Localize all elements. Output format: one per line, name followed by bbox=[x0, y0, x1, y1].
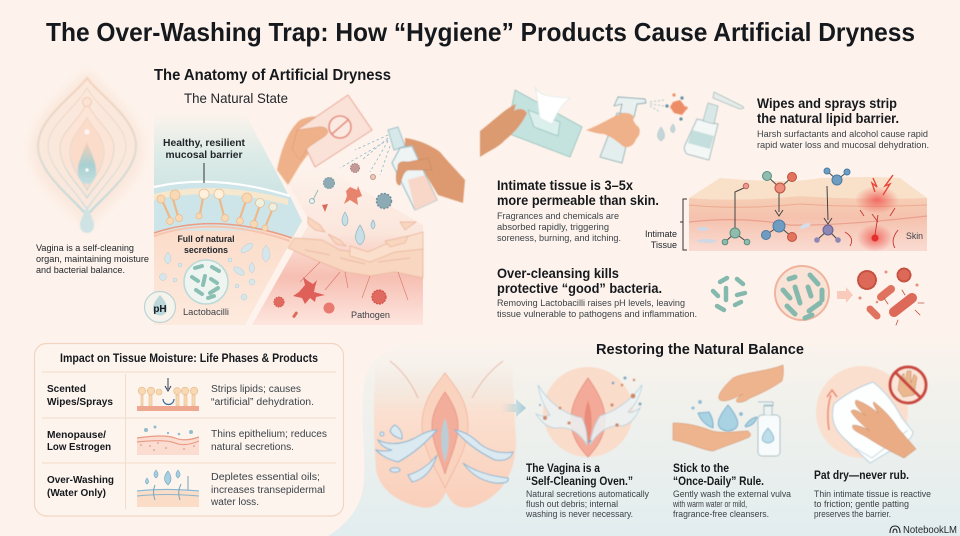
text: over-cleansing: tissue vulnerable to pathogens and inflammation. bbox=[497, 309, 697, 319]
irritants and pathogens bbox=[274, 164, 392, 318]
droplets bbox=[160, 242, 270, 300]
water streams bbox=[376, 425, 513, 483]
text: pat dry: preserves the barrier. bbox=[814, 509, 891, 519]
cracked skin plates bbox=[288, 217, 423, 278]
label: pathogen: Pathogen bbox=[351, 310, 390, 320]
label: lactobacilli: Lactobacilli bbox=[183, 307, 229, 317]
row: scented wipes: Wipes/Sprays bbox=[47, 396, 113, 408]
text: once-daily rule: with warm water or mild, bbox=[672, 499, 747, 509]
illustration: self-cleaning circle bbox=[536, 367, 642, 457]
panel: damaged tissue bbox=[252, 95, 465, 325]
lactobacilli circle bbox=[184, 260, 228, 304]
text: wipes and sprays: Wipes and sprays strip bbox=[757, 95, 897, 111]
label: natural secretions: secretions bbox=[184, 245, 228, 255]
text: over-cleansing: Over-cleansing kills bbox=[497, 265, 619, 281]
illustration: anatomy with water streams bbox=[374, 361, 516, 508]
no-rubbing sign bbox=[890, 367, 926, 403]
text: once-daily rule: Gently wash the external vulva bbox=[673, 489, 791, 499]
good bacteria cluster bbox=[713, 278, 745, 310]
circled bacteria bbox=[775, 266, 829, 320]
text: wipes and sprays: rapid water loss and mucosal dehydration. bbox=[757, 140, 929, 150]
text: wipes and sprays: the natural lipid barrier. bbox=[757, 110, 899, 126]
text: once-daily rule: fragrance-free cleansers. bbox=[673, 509, 769, 519]
row: over-washing: (Water Only) bbox=[47, 487, 106, 499]
wipes pack bbox=[480, 87, 582, 157]
text: wipes and sprays bbox=[757, 95, 929, 150]
label: intimate tissue: Tissue bbox=[651, 240, 677, 250]
text: self-cleaning organ bbox=[36, 243, 149, 276]
label: skin: Skin bbox=[906, 231, 923, 241]
diagram: bacteria loss bbox=[713, 266, 924, 325]
row: over-washing: Over-Washing bbox=[47, 474, 114, 486]
pink arrow bbox=[837, 287, 853, 303]
label: natural secretions bbox=[178, 234, 234, 255]
spray bottle and hand bbox=[388, 127, 465, 210]
mist and irritant bbox=[650, 93, 688, 141]
cleanser bottle bbox=[758, 402, 780, 456]
label: natural secretions: Full of natural bbox=[178, 234, 234, 244]
text: once-daily rule: Stick to the bbox=[673, 463, 729, 475]
text: intimate tissue permeability: soreness, burning, and itching. bbox=[497, 233, 621, 243]
text: self-cleaning oven: flush out debris; internal bbox=[526, 499, 618, 509]
text: self-cleaning oven: washing is never necessary. bbox=[525, 509, 633, 519]
heading: anatomy of artificial dryness: The Anatomy of Artificial Dryness bbox=[154, 67, 391, 84]
upper hand bbox=[719, 365, 783, 402]
spray bottle bbox=[586, 97, 646, 163]
lower hand bbox=[673, 423, 751, 451]
text: self-cleaning organ: Vagina is a self-cleaning bbox=[36, 243, 134, 254]
title: The Over-Washing Trap: How “Hygiene” Products Cause Artificial Dryness bbox=[46, 17, 915, 47]
text: self-cleaning oven bbox=[525, 463, 649, 519]
lipid bilayer bbox=[154, 188, 288, 231]
text: once-daily rule bbox=[672, 463, 791, 519]
text: over-cleansing: protective “good” bacteria. bbox=[497, 280, 662, 296]
label: intimate tissue: Intimate bbox=[645, 229, 677, 239]
text: pat dry bbox=[814, 470, 931, 519]
row: menopause: Menopause/ bbox=[47, 429, 106, 441]
wipes packet and hand bbox=[277, 95, 372, 185]
text: self-cleaning organ: and bacterial balance. bbox=[36, 265, 125, 276]
row: over-washing: water loss. bbox=[210, 497, 259, 508]
text: pat dry: Pat dry—never rub. bbox=[814, 470, 909, 482]
row: menopause: natural secretions. bbox=[211, 442, 294, 453]
text: intimate tissue permeability: absorbed rapidly, triggering bbox=[497, 222, 609, 232]
label: healthy barrier: mucosal barrier bbox=[166, 149, 242, 161]
spray mist bbox=[340, 135, 390, 175]
text: intimate tissue permeability: more permeable than skin. bbox=[497, 192, 659, 208]
illustration: gentle washing hands and cleanser bbox=[673, 365, 783, 456]
text: once-daily rule: “Once-Daily” Rule. bbox=[673, 476, 764, 488]
text: intimate tissue permeability: Fragrances and chemicals are bbox=[497, 211, 619, 221]
text: pat dry: Thin intimate tissue is reactive bbox=[814, 489, 931, 499]
text: intimate tissue permeability bbox=[497, 177, 659, 243]
row: scented wipes bbox=[47, 378, 314, 411]
row: scented wipes: Scented bbox=[47, 383, 86, 395]
text: intimate tissue permeability: Intimate tissue is 3–5x bbox=[497, 177, 633, 193]
arrow to self-cleaning bbox=[503, 399, 526, 417]
row: scented wipes: “artificial” dehydration. bbox=[211, 397, 314, 408]
table heading: Impact on Tissue Moisture: Life Phases & Products bbox=[60, 351, 318, 365]
row: scented wipes: Strips lipids; causes bbox=[211, 384, 301, 395]
label: healthy barrier: Healthy, resilient bbox=[163, 137, 245, 149]
text: self-cleaning organ: organ, maintaining moisture bbox=[36, 254, 149, 265]
row: over-washing: increases transepidermal bbox=[211, 485, 325, 496]
illustration: pat dry towel bbox=[816, 366, 926, 463]
pH badge: pH bbox=[153, 304, 167, 315]
text: self-cleaning oven: “Self-Cleaning Oven.” bbox=[526, 476, 633, 488]
text: pat dry: to friction; gentle patting bbox=[814, 499, 909, 509]
label: healthy barrier bbox=[163, 137, 245, 161]
text: self-cleaning oven: The Vagina is a bbox=[526, 463, 601, 475]
text: over-cleansing: Removing Lactobacilli raises pH levels, leaving bbox=[497, 298, 685, 308]
panel: healthy mucosa chevron bbox=[144, 113, 302, 325]
illustration: natural vulva bbox=[30, 70, 144, 233]
heading: restoring balance: Restoring the Natural Balance bbox=[596, 342, 804, 358]
panel: tissue moisture table bbox=[34, 344, 344, 516]
arrows and molecules bbox=[725, 171, 847, 242]
pathogenic bacteria bbox=[858, 268, 924, 325]
water drop and splashes bbox=[692, 401, 757, 431]
row: menopause: Low Estrogen bbox=[47, 441, 111, 453]
pH badge bbox=[144, 292, 176, 322]
row: menopause: Thins epithelium; reduces bbox=[211, 429, 327, 440]
subheading: natural state: The Natural State bbox=[184, 90, 288, 106]
douche bottle bbox=[684, 92, 744, 160]
text: over-cleansing bbox=[497, 265, 697, 319]
diagram: tissue cross-section bbox=[645, 168, 927, 252]
background blob: restoring section bbox=[328, 333, 960, 536]
row: over-washing: Depletes essential oils; bbox=[211, 472, 320, 483]
illustration: wipes, spray, douche products bbox=[480, 87, 744, 163]
text: self-cleaning oven: Natural secretions automatically bbox=[526, 489, 649, 499]
label: intimate tissue bbox=[645, 229, 677, 250]
row: over-washing bbox=[47, 470, 325, 508]
text: wipes and sprays: Harsh surfactants and alcohol cause rapid bbox=[757, 129, 928, 139]
row: menopause bbox=[47, 426, 327, 455]
